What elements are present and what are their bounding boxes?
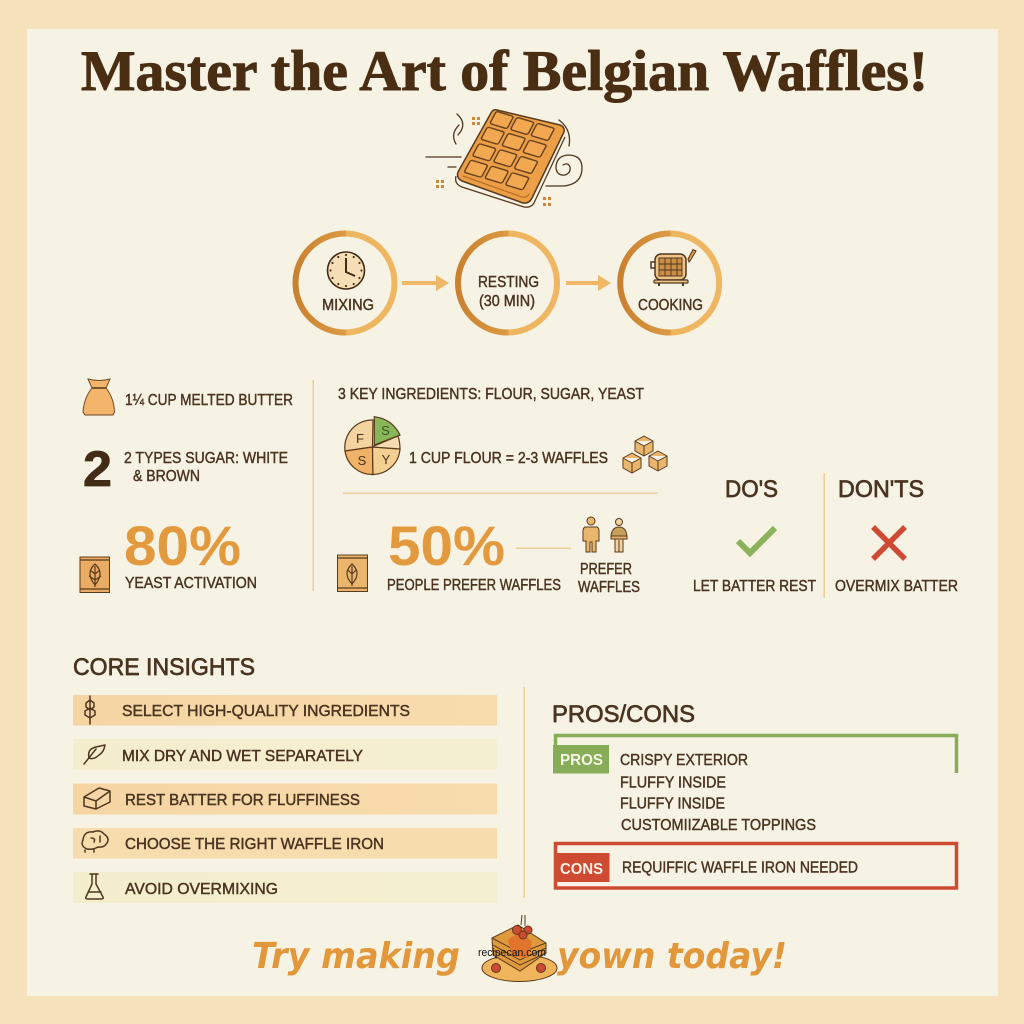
arrow: mixing to resting	[402, 275, 449, 291]
arrow: resting to cooking	[566, 275, 611, 291]
icon: flour sack	[83, 379, 114, 415]
heading: core insights: CORE INSIGHTS	[73, 654, 255, 681]
label: cooking: COOKING	[638, 297, 703, 314]
insight row 4	[73, 828, 497, 858]
icon: person with waffle table	[611, 518, 627, 552]
sugar stat: & BROWN	[133, 468, 200, 485]
icon: person	[583, 517, 599, 552]
big stat 50%: 50%	[388, 514, 505, 577]
pros list: CRISPY EXTERIOR	[620, 752, 748, 769]
icon: packet	[338, 555, 368, 592]
don'ts heading: DON'TS	[838, 476, 924, 503]
icon: check	[738, 528, 775, 553]
do text: LET BATTER REST	[693, 578, 816, 595]
insight row 3	[73, 784, 497, 814]
butter stat: 1¼ CUP MELTED BUTTER	[125, 392, 293, 409]
don't text: OVERMIX BATTER	[835, 578, 958, 595]
do's heading: DO'S	[725, 476, 778, 503]
pros list	[620, 752, 816, 834]
cons box	[556, 844, 956, 888]
title: Master the Art of Belgian Waffles!	[81, 40, 928, 103]
prefer waffles label: WAFFLES	[578, 579, 640, 596]
insight row 2: MIX DRY AND WET SEPARATELY	[122, 748, 363, 765]
pros list: FLUFFY INSIDE	[620, 774, 726, 792]
icon: cross	[873, 527, 905, 559]
sugar stat: 2 TYPES SUGAR: WHITE	[124, 450, 288, 467]
insight row 4: CHOOSE THE RIGHT WAFFLE IRON	[125, 836, 384, 853]
pie chart	[345, 417, 400, 475]
icon: waffle	[426, 110, 582, 207]
insight row 5	[73, 872, 497, 903]
insight row 3: REST BATTER FOR FLUFFINESS	[125, 792, 360, 809]
label: resting: RESTING	[478, 274, 539, 291]
process step: cooking	[620, 234, 719, 332]
icon: yeast packet	[80, 557, 110, 592]
pros list: FLUFFY INSIDE	[620, 796, 725, 812]
prefer waffles label	[578, 561, 640, 596]
watermark: recipecan.com	[478, 947, 546, 959]
panel: do's and don'ts	[693, 473, 958, 598]
footer text left: Try making	[252, 936, 460, 977]
cons tag: CONS	[560, 861, 603, 878]
icon: clock	[328, 252, 364, 289]
footer call to action	[252, 915, 787, 982]
insight row 5: AVOID OVERMIXING	[125, 881, 278, 898]
pros bracket	[556, 736, 956, 773]
big number 2: 2	[83, 441, 112, 497]
footer text right: yown today!	[557, 936, 787, 977]
prefer waffles label: PREFER	[580, 561, 632, 578]
pros list: CUSTOMIIZABLE TOPPINGS	[621, 817, 816, 834]
label: mixing: MIXING	[322, 297, 374, 314]
heading: pros/cons: PROS/CONS	[552, 701, 695, 728]
big stat 80%: 80%	[124, 514, 241, 577]
process step: mixing	[296, 234, 394, 332]
icon: waffle stack with strawberries	[482, 915, 557, 982]
insight row 1	[73, 695, 497, 726]
cons text: REQUIFFIC WAFFLE IRON NEEDED	[622, 860, 858, 876]
pie chart: Y	[382, 452, 391, 467]
process step: resting	[458, 234, 557, 332]
insight row 2	[73, 739, 497, 770]
flour ratio: 1 CUP FLOUR = 2-3 WAFFLES	[409, 450, 608, 467]
sugar stat	[124, 450, 288, 485]
pros tag: PROS	[560, 752, 603, 769]
stat column: left	[80, 379, 293, 592]
insight row 1: SELECT HIGH-QUALITY INGREDIENTS	[122, 703, 410, 720]
panel: core insights	[73, 654, 497, 903]
pie chart: S	[381, 423, 390, 438]
cons tag	[554, 853, 610, 882]
pros tag	[553, 745, 609, 774]
ingredients heading: 3 KEY INGREDIENTS: FLOUR, SUGAR, YEAST	[338, 386, 644, 403]
people label: PEOPLE PREFER WAFFLES	[387, 577, 561, 594]
icon: waffle iron	[651, 250, 696, 286]
yeast label: YEAST ACTIVATION	[125, 575, 257, 592]
pie chart: S	[358, 453, 367, 468]
label: 30 min: (30 MIN)	[479, 293, 535, 310]
icon: sugar cubes	[623, 436, 667, 473]
panel: pros and cons	[552, 701, 956, 888]
pie chart: F	[356, 431, 364, 446]
stat column: centre	[338, 386, 667, 596]
